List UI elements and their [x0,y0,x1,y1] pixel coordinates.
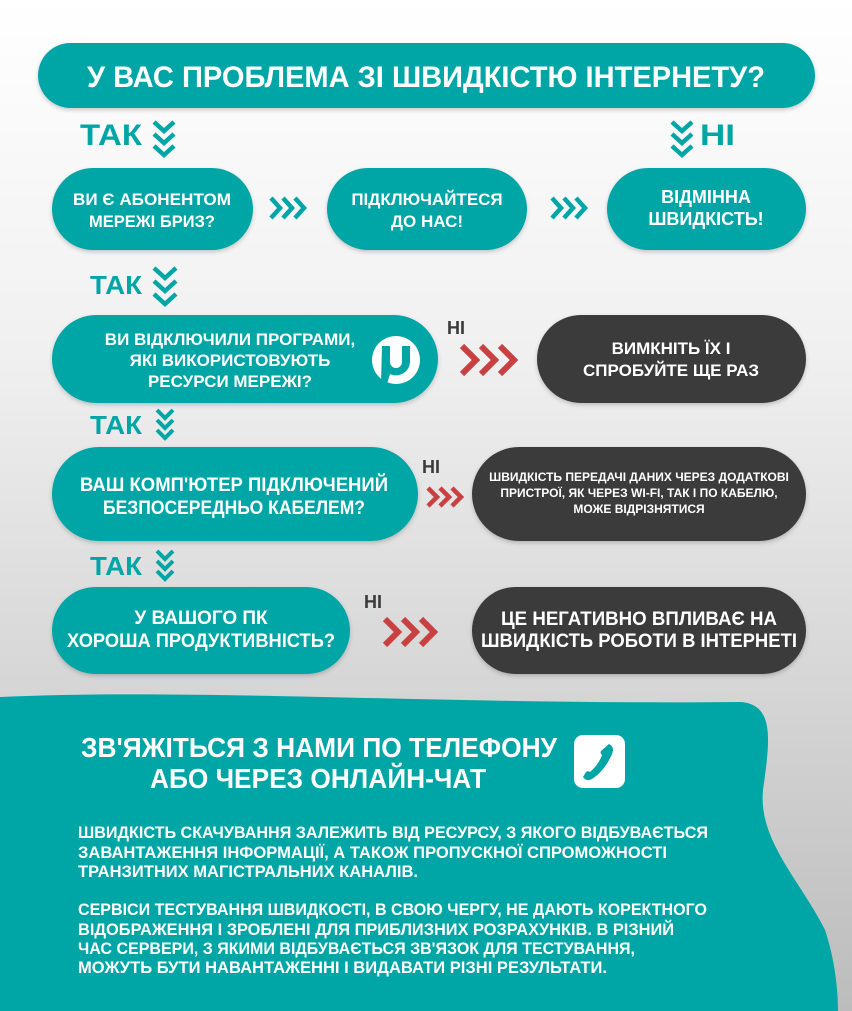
title [38,43,815,108]
box: programs [52,315,438,403]
box: pc performance: У ВАШОГО ПК [134,608,268,629]
label: ТАК 2 [90,268,176,304]
box: wifi note [472,447,806,541]
box: negative: ЦЕ НЕГАТИВНО ВПЛИВАЄ НА [501,609,777,630]
box: wifi note: МОЖЕ ВІДРІЗНЯТИСЯ [573,502,705,516]
heading: contact: ЗВ'ЯЖІТЬСЯ З НАМИ ПО ТЕЛЕФОНУ [81,732,558,763]
text: paragraph 2: СЕРВІСИ ТЕСТУВАННЯ ШВИДКОСТІ, В СВОЮ ЧЕРГУ, НЕ ДАЮТЬ КОРЕКТНОГО [78,900,707,919]
box: programs: РЕСУРСИ МЕРЕЖІ? [148,372,312,391]
box: great speed: ВІДМІННА [661,187,751,207]
box: pc performance: ХОРОША ПРОДУКТИВНІСТЬ? [67,631,335,652]
box: programs: ВИ ВІДКЛЮЧИЛИ ПРОГРАМИ, [105,330,355,349]
box: great speed [607,168,806,250]
icon: utorrent [372,336,420,384]
box: connect: ДО НАС! [391,212,463,231]
label: ТАК top [80,119,174,155]
label: НІ 4: НІ [364,592,382,612]
title: У ВАС ПРОБЛЕМА ЗІ ШВИДКІСТЮ ІНТЕРНЕТУ? [87,61,765,94]
label: ТАК top: ТАК [80,119,143,152]
box: subscriber: ВИ Є АБОНЕНТОМ [73,190,231,209]
panel: contact [0,694,838,1011]
box: great speed: ШВИДКІСТЬ! [648,209,764,229]
arrow: red 4 [385,619,434,645]
label: ТАК 4: ТАК [90,551,142,581]
box: cable [52,447,418,541]
box: wifi note: ПРИСТРОЇ, ЯК ЧЕРЕЗ WI-FI, ТАК І ПО КАБЕЛЮ, [500,485,778,500]
box: pc performance [52,587,350,674]
arrow: red 3 [428,488,461,506]
label: НІ top: НІ [700,119,735,152]
text: paragraph 2: ВІДОБРАЖЕННЯ І ЗРОБЛЕНІ ДЛЯ ПРИБЛИЗНИХ РОЗРАХУНКІВ. В РІЗНИЙ [78,920,674,939]
label: НІ 2: НІ [447,318,465,338]
text: paragraph 2 [78,900,707,977]
arrow: row1 a [271,198,304,218]
box: negative [472,587,806,674]
box: programs: ЯКІ ВИКОРИСТОВУЮТЬ [130,351,330,370]
label: НІ 3: НІ [422,457,440,477]
box: connect: ПІДКЛЮЧАЙТЕСЯ [351,190,503,209]
text: paragraph 1: ТРАНЗИТНИХ МАГІСТРАЛЬНИХ КАНАЛІВ. [78,862,418,881]
box: cable: БЕЗПОСЕРЕДНЬО КАБЕЛЕМ? [103,498,365,519]
label: ТАК 4 [90,551,173,581]
box: turn off [537,315,806,403]
box: subscriber: МЕРЕЖІ БРИЗ? [89,212,215,231]
box: negative: ШВИДКІСТЬ РОБОТИ В ІНТЕРНЕТІ [481,631,797,652]
arrow: row1 b [552,198,585,218]
heading: contact [81,732,558,794]
text: paragraph 1: ШВИДКІСТЬ СКАЧУВАННЯ ЗАЛЕЖИТЬ ВІД РЕСУРСУ, З ЯКОГО ВІДБУВАЄТЬСЯ [78,823,708,842]
label: НІ top [672,119,735,155]
arrow: red 2 [462,346,514,374]
heading: contact: АБО ЧЕРЕЗ ОНЛАЙН-ЧАТ [150,762,486,794]
text: paragraph 1: ЗАВАНТАЖЕННЯ ІНФОРМАЦІЇ, А ТАКОЖ ПРОПУСКНОЇ СПРОМОЖНОСТІ [78,843,667,862]
text: paragraph 2: МОЖУТЬ БУТИ НАВАНТАЖЕННІ І ВИДАВАТИ РІЗНІ РЕЗУЛЬТАТИ. [78,958,607,977]
label: ТАК 3 [90,410,173,440]
box: connect [327,168,527,250]
label: ТАК 2: ТАК [90,270,142,300]
box: cable: ВАШ КОМП'ЮТЕР ПІДКЛЮЧЕНИЙ [80,474,388,496]
box: subscriber [52,168,253,250]
label: ТАК 3: ТАК [90,410,142,440]
text: paragraph 1 [78,823,708,881]
box: turn off: ВИМКНІТЬ ЇХ І [612,339,730,358]
box: wifi note: ШВИДКІСТЬ ПЕРЕДАЧІ ДАНИХ ЧЕРЕЗ ДОДАТКОВІ [489,470,789,484]
box: turn off: СПРОБУЙТЕ ЩЕ РАЗ [583,361,759,380]
icon: phone [574,735,625,788]
text: paragraph 2: ЧАС СЕРВЕРИ, З ЯКИМИ ВІДБУВАЄТЬСЯ ЗВ'ЯЗОК ДЛЯ ТЕСТУВАННЯ, [78,939,635,958]
